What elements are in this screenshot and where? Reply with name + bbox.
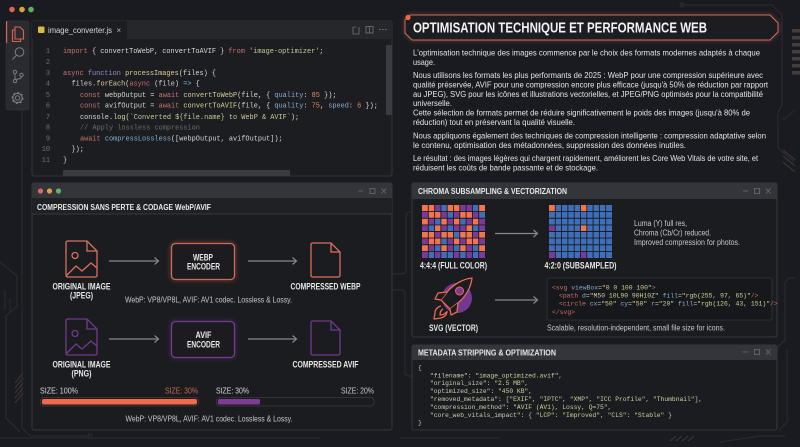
box: avif encoder: AVIF bbox=[196, 330, 212, 340]
code: line numbers: 5 bbox=[46, 92, 50, 100]
decorative vent: right edge bbox=[792, 29, 800, 74]
bar chart: avif size: SIZE: 20% bbox=[341, 386, 374, 396]
panel: code editor bbox=[32, 21, 392, 176]
code: source: console.log(`Converted ${file.name} to WebP & AVIF`); bbox=[80, 114, 299, 122]
code block: svg: </svg> bbox=[552, 309, 575, 316]
code block: json: "optimized_size": "450 KB", bbox=[430, 388, 532, 395]
text block: intro paragraphs: le contenu, optimisation des métadonnées, suppression des données inutiles. bbox=[413, 140, 686, 150]
code block: svg: <svg viewBox="0 0 100 100"> bbox=[552, 284, 656, 292]
label: original jpeg: ORIGINAL IMAGE bbox=[52, 281, 110, 291]
text block: luma chroma: Chroma (Cb/Cr) reduced. bbox=[634, 228, 711, 238]
tab: image_converter.js bbox=[32, 21, 127, 39]
text block: intro paragraphs: L'optimisation technique des images commence par le choix des formats modernes adaptés à chaque bbox=[413, 48, 760, 58]
code: source: files.forEach(async (file) => { bbox=[72, 80, 200, 88]
box: avif encoder bbox=[172, 322, 234, 358]
text block: intro paragraphs: réduction) tout en préservant la qualité visuelle. bbox=[413, 117, 575, 127]
note: codecs: WebP: VP8/VP8L, AVIF: AV1 codec. Lossless & Lossy. bbox=[126, 414, 292, 424]
bar chart: avif size bbox=[216, 386, 374, 406]
box: webp encoder bbox=[172, 244, 234, 280]
label: original jpeg: (JPEG) bbox=[70, 290, 93, 300]
icons: editor actions bbox=[353, 26, 386, 34]
icon: compressed avif bbox=[311, 321, 340, 355]
tab: image_converter.js: image_converter.js bbox=[48, 26, 112, 35]
code: source: import { convertToWebP, convertToAVIF } from 'image-optimizer'; bbox=[63, 48, 324, 56]
code: source: await compressLossless([webpOutput, avifOutput]); bbox=[80, 136, 283, 144]
icon: original image jpeg bbox=[66, 241, 97, 277]
code: source: }); bbox=[72, 146, 84, 154]
window controls bbox=[38, 188, 386, 194]
icon: rocket bbox=[434, 278, 472, 319]
arrow bbox=[495, 296, 538, 304]
text block: intro paragraphs: usage. bbox=[413, 57, 435, 67]
label: compressed avif: COMPRESSED AVIF bbox=[292, 359, 359, 369]
code block: json: "original_size": "2.5 MB", bbox=[430, 380, 528, 387]
bar chart: webp size bbox=[40, 386, 198, 406]
label: original png: ORIGINAL IMAGE bbox=[52, 359, 110, 369]
code block: json: "core_web_vitals_impact": { "LCP": "Improved", "CLS": "Stable" } bbox=[430, 412, 672, 419]
text block: intro paragraphs bbox=[413, 48, 769, 172]
chart: 4:2:0 pixel grid bbox=[549, 205, 612, 258]
box: avif encoder: ENCODER bbox=[187, 340, 220, 350]
caption: svg: Scalable, resolution-independent, small file size for icons. bbox=[547, 324, 725, 332]
code block: json: } bbox=[418, 420, 422, 426]
code: source: const webpOutput = await convertToWebP(file, { quality: 85 }); bbox=[80, 92, 336, 100]
code: line numbers: 3 bbox=[46, 70, 50, 78]
panel: chroma subsampling bbox=[412, 183, 778, 337]
icon: files bbox=[12, 27, 24, 42]
title frame bbox=[405, 15, 778, 40]
label: compressed webp: COMPRESSED WEBP bbox=[290, 281, 360, 291]
code block: json: "compression_method": "AVIF (AV1), Lossy, Q=75", bbox=[430, 404, 611, 411]
code: line numbers bbox=[42, 48, 50, 165]
icon: search bbox=[12, 48, 24, 60]
icon: original image png bbox=[66, 319, 97, 355]
arrow bbox=[495, 230, 538, 237]
text block: intro paragraphs: réduisent les coûts de bande passante et de stockage. bbox=[413, 162, 598, 172]
panel heading: COMPRESSION SANS PERTE & CODAGE WebP/AVIF bbox=[37, 202, 211, 212]
code: source: const avifOutput = await convertToAVIF(file, { quality: 75, speed: 6 }); bbox=[80, 102, 378, 110]
arrow bbox=[109, 336, 158, 342]
code block: json: { bbox=[418, 364, 422, 372]
text block: luma chroma: Luma (Y) full res, bbox=[634, 219, 687, 228]
code: source: async function processImages(files) { bbox=[63, 70, 216, 78]
text block: intro paragraphs: Nous utilisons les formats les plus performants de 2025 : WebP pour une compression supérieure avec bbox=[413, 70, 764, 80]
text block: luma chroma bbox=[634, 219, 740, 247]
code: source bbox=[63, 48, 378, 165]
label: original jpeg bbox=[52, 281, 110, 300]
bar chart: webp size: SIZE: 30% bbox=[165, 386, 198, 396]
code block: json bbox=[418, 364, 702, 426]
code: source: // Apply lossless compression bbox=[80, 124, 200, 132]
window controls bbox=[743, 350, 770, 354]
bar chart: avif size: SIZE: 30% bbox=[216, 386, 249, 396]
label: original png: (PNG) bbox=[72, 368, 92, 378]
box: webp encoder: WEBP bbox=[193, 252, 213, 262]
code: line numbers: 10 bbox=[42, 146, 50, 154]
text block: intro paragraphs: Cette sélection de formats permet de réduire significativement le poids des images (jusqu'à 80% de bbox=[413, 108, 750, 118]
code: line numbers: 4 bbox=[46, 80, 50, 88]
panel: metadata bbox=[412, 345, 777, 430]
arrow bbox=[109, 258, 158, 264]
arrow bbox=[248, 336, 296, 342]
code: line numbers: 2 bbox=[46, 59, 50, 67]
code: line numbers: 9 bbox=[46, 136, 50, 144]
code block: json: "removed_metadata": ["EXIF", "IPTC", "XMP", "ICC Profile", "Thumbnail"], bbox=[430, 396, 702, 403]
code: line numbers: 1 bbox=[46, 48, 50, 56]
panel: compression bbox=[32, 183, 392, 430]
traffic lights: top window bbox=[9, 7, 34, 12]
code: line numbers: 7 bbox=[46, 114, 50, 122]
code block: svg: <path d="M50 10L90 90H10Z" fill="rgb(255, 97, 65)"/> bbox=[559, 292, 759, 300]
label: original png bbox=[52, 359, 110, 378]
label: 4:2:0: 4:2:0 (SUBSAMPLED) bbox=[544, 260, 616, 270]
code: source: } bbox=[63, 157, 67, 165]
label: svg vector: SVG (VECTOR) bbox=[429, 323, 478, 333]
window controls bbox=[743, 188, 770, 194]
note: codecs: WebP: VP8/VP8L, AVIF: AV1 codec. Lossless & Lossy. bbox=[125, 296, 292, 304]
chart: 4:4:4 pixel grid bbox=[422, 205, 485, 258]
sidebar: activity bar icons bbox=[6, 21, 29, 110]
code: line numbers: 8 bbox=[46, 124, 50, 132]
text block: intro paragraphs: universelle. bbox=[413, 98, 452, 108]
scrollbars bbox=[63, 45, 392, 176]
code block: svg bbox=[547, 278, 778, 320]
bar chart: webp size: SIZE: 100% bbox=[40, 386, 78, 396]
text block: luma chroma: Improved compression for photos. bbox=[634, 238, 740, 247]
arrow bbox=[248, 258, 296, 264]
text block: intro paragraphs: Nous appliquons également des techniques de compression intelligente : compression adaptative selon bbox=[413, 130, 766, 140]
code block: json: "filename": "image_optimized.avif", bbox=[430, 372, 562, 380]
code: line numbers: 11 bbox=[42, 157, 50, 165]
label: 4:4:4: 4:4:4 (FULL COLOR) bbox=[420, 260, 487, 270]
panel heading: METADATA STRIPPING & OPTIMIZATION bbox=[418, 348, 556, 358]
tab: image_converter.js: × bbox=[116, 26, 122, 35]
icon: settings bbox=[12, 93, 23, 103]
heading: OPTIMISATION TECHNIQUE ET PERFORMANCE WEB bbox=[413, 20, 707, 36]
panel heading: CHROMA SUBSAMPLING & VECTORIZATION bbox=[418, 186, 567, 196]
icon: compressed webp bbox=[311, 243, 340, 277]
icon: source control bbox=[13, 70, 23, 83]
code: line numbers: 6 bbox=[46, 102, 50, 110]
code block: svg: <circle cx="50" cy="50" r="20" fill="rgb(126, 43, 151)"/> bbox=[559, 300, 778, 308]
box: webp encoder: ENCODER bbox=[187, 262, 220, 272]
